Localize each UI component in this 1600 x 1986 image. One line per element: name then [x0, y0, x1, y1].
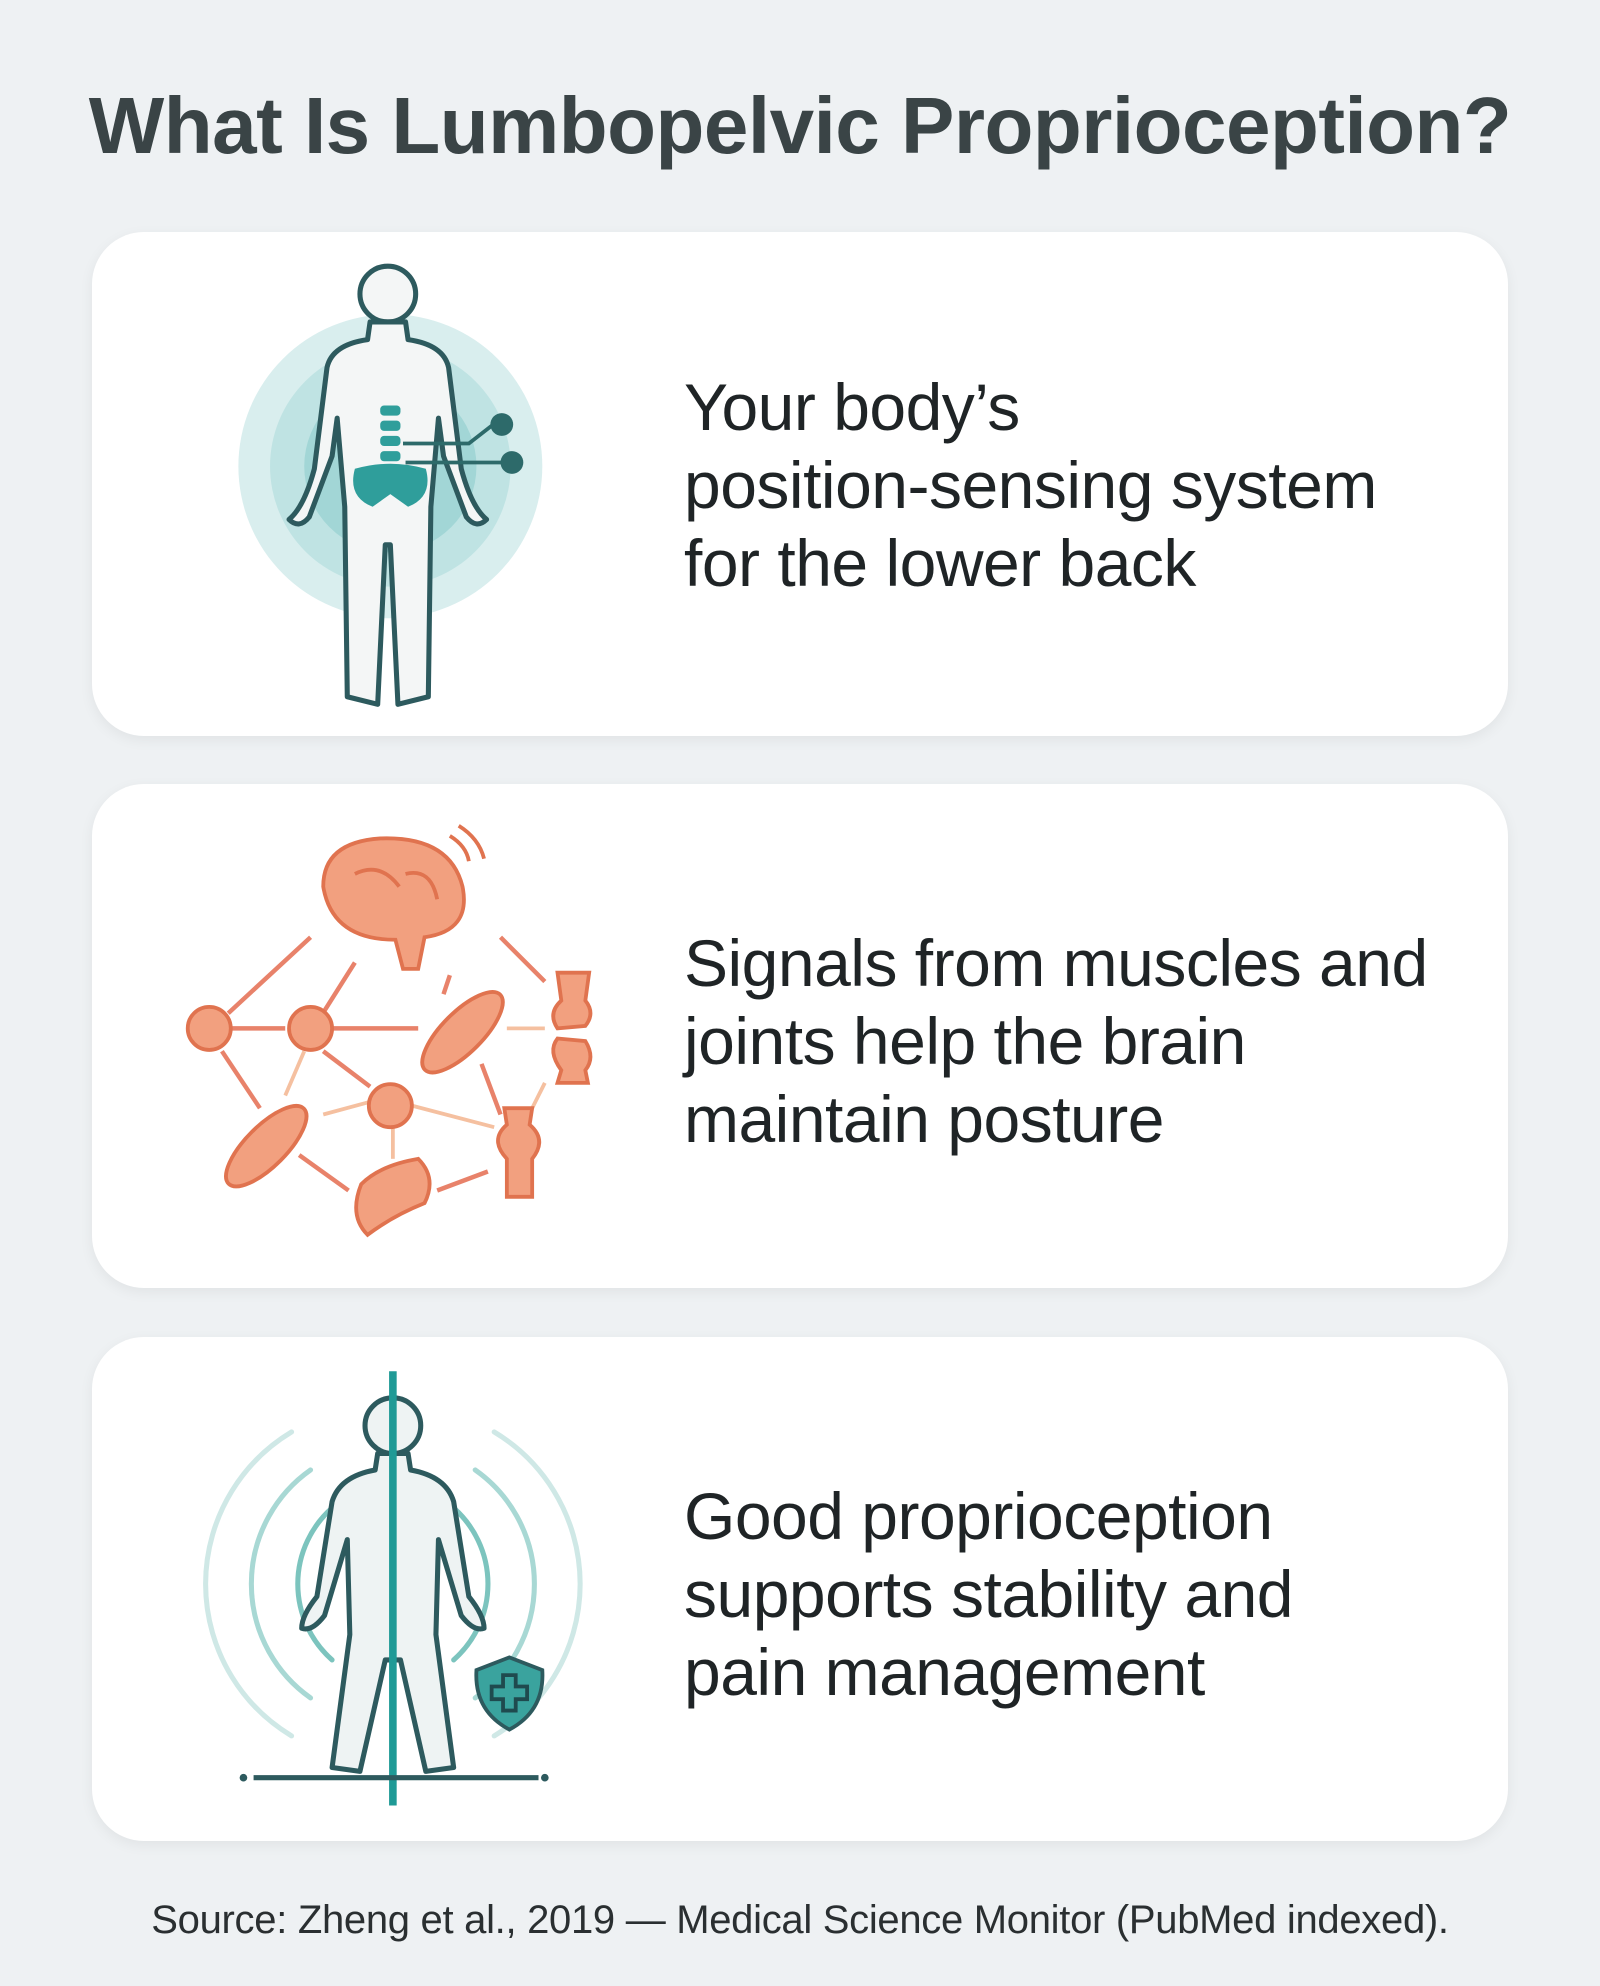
text block: joints help the brain — [684, 1004, 1246, 1078]
title: What Is Lumbopelvic Proprioception? — [89, 81, 1511, 170]
icon: body with pelvis — [238, 264, 542, 707]
text block — [684, 1479, 1293, 1709]
text block: Your body’s — [684, 370, 1020, 444]
text block: Good proprioception — [684, 1479, 1273, 1553]
text block: position-sensing system — [684, 448, 1377, 522]
text block: Signals from muscles and — [684, 926, 1428, 1000]
text block: maintain posture — [684, 1082, 1164, 1156]
panel: signals — [92, 784, 1508, 1288]
icon: brain network — [186, 824, 592, 1238]
text block: for the lower back — [684, 526, 1196, 600]
text block: supports stability and — [684, 1557, 1293, 1631]
source note: Source: Zheng et al., 2019 — Medical Science Monitor (PubMed indexed). — [151, 1898, 1449, 1942]
panel: stability — [92, 1337, 1508, 1841]
icon: balanced body — [203, 1371, 583, 1806]
text block: pain management — [684, 1635, 1205, 1709]
panel: position sensing — [92, 232, 1508, 736]
text block — [682, 926, 1428, 1156]
text block — [684, 370, 1377, 600]
